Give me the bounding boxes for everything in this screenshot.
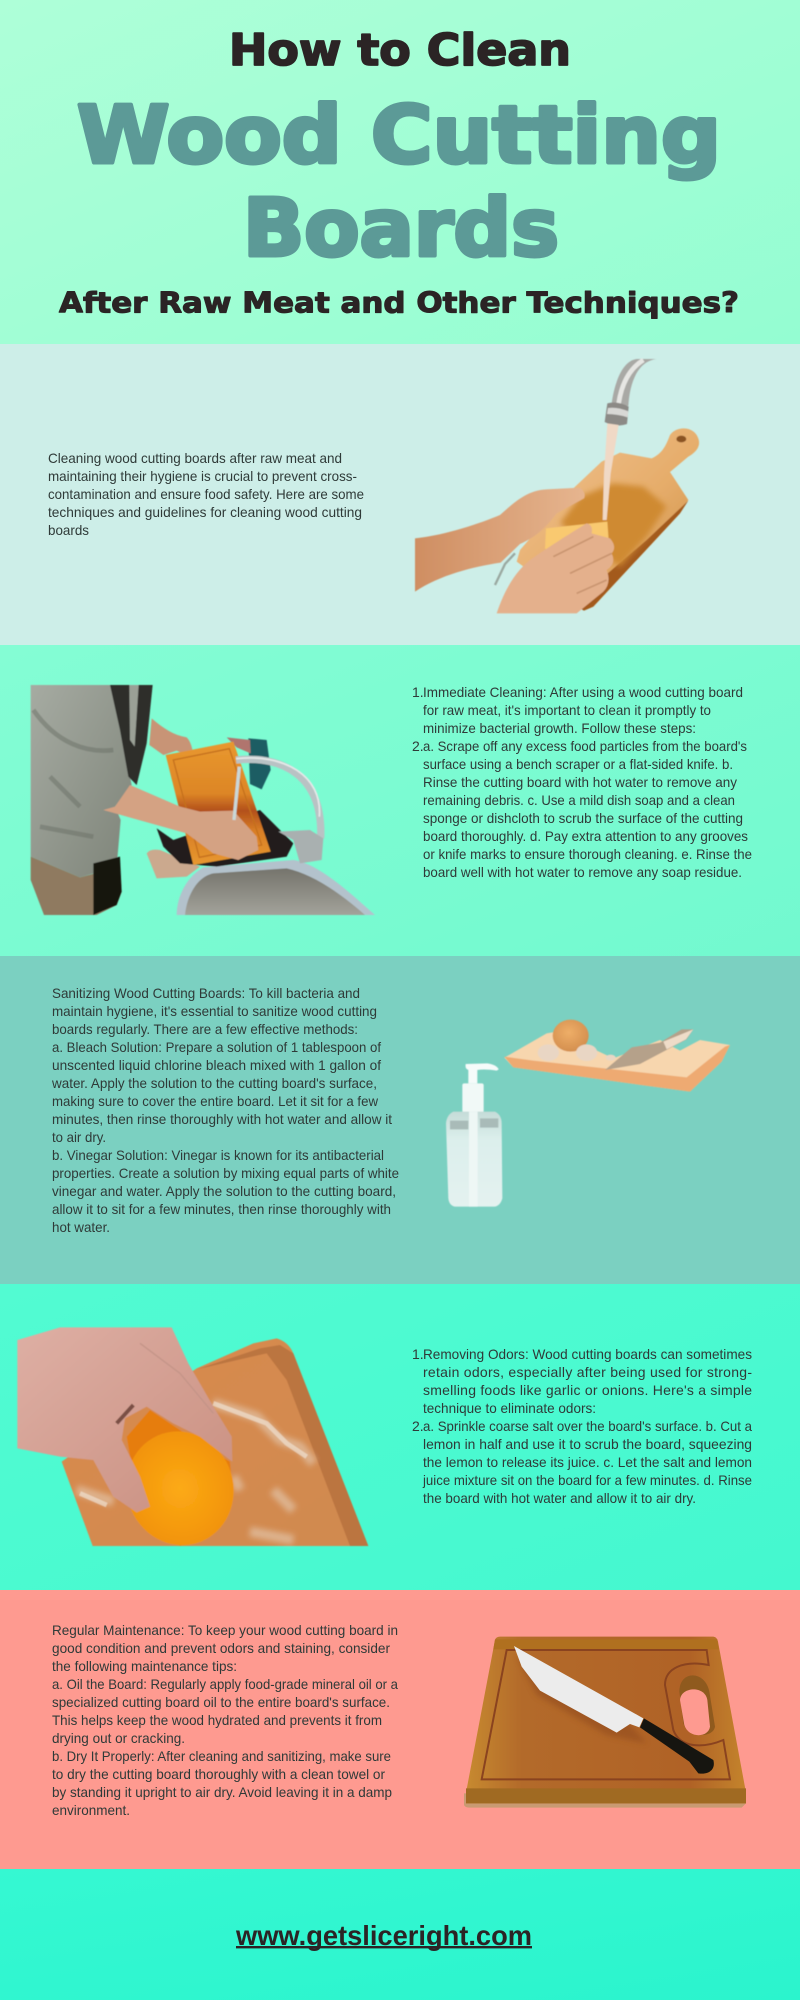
text: sanitizing: vinegar and water. Apply the solution to the cutting board, <box>52 1183 396 1199</box>
image: board with onion and knife, soap bottle <box>446 1020 730 1207</box>
text: regular maintenance: Regular Maintenance: To keep your wood cutting board in <box>52 1622 398 1638</box>
text: removing odors list: juice mixture sit on the board for a few minutes. d. Rinse <box>422 1472 752 1488</box>
text: regular maintenance: specialized cutting board oil to the entire board's surface. <box>52 1694 390 1710</box>
text: regular maintenance: a. Oil the Board: Regularly apply food-grade mineral oil or a <box>52 1676 398 1692</box>
text: immediate cleaning list: board well with hot water to remove any soap residue. <box>423 864 742 880</box>
text: immediate cleaning list: Rinse the cutting board with hot water to remove any <box>423 774 737 790</box>
text: removing odors list: the board with hot water and allow it to air dry. <box>423 1490 696 1506</box>
image: hand scrubbing board with lemon and salt <box>17 1327 368 1559</box>
text: removing odors list: lemon in half and use it to scrub the board, squeezing <box>423 1436 752 1452</box>
text: sanitizing: b. Vinegar Solution: Vinegar is known for its antibacterial <box>52 1147 384 1163</box>
text: immediate cleaning list: or knife marks to ensure thorough cleaning. e. Rinse the <box>423 846 752 862</box>
text: immediate cleaning list: Immediate Cleaning: After using a wood cutting board <box>423 684 743 700</box>
text: sanitizing: minutes, then rinse thoroughly with hot water and allow it <box>52 1111 392 1127</box>
text: removing odors list: 2. <box>412 1418 424 1434</box>
panel: footer <box>0 1869 800 2000</box>
text: immediate cleaning list: 2. <box>412 738 424 754</box>
text: removing odors list: retain odors, especially after being used for strong- <box>423 1364 752 1380</box>
image: wooden board with chef knife <box>464 1637 746 1808</box>
image: man rinsing board at sink <box>31 685 375 915</box>
heading: How to Clean: How to Clean <box>229 25 571 76</box>
text: removing odors list: smelling foods like garlic or onions. Here's a simple <box>423 1382 752 1398</box>
text: regular maintenance: drying out or cracking. <box>52 1730 185 1746</box>
text: regular maintenance: This helps keep the wood hydrated and prevents it from <box>52 1712 382 1728</box>
text: removing odors list: Removing Odors: Wood cutting boards can sometimes <box>423 1346 752 1362</box>
text: sanitizing: unscented liquid chlorine bleach mixed with 1 gallon of <box>52 1057 381 1073</box>
text: sanitizing: hot water. <box>52 1219 110 1235</box>
text: immediate cleaning list <box>412 684 752 880</box>
text: immediate cleaning list: board thoroughly. d. Pay extra attention to any grooves <box>423 828 748 844</box>
panel: sanitizing <box>0 956 800 1284</box>
text: sanitizing: boards regularly. There are a few effective methods: <box>52 1021 358 1037</box>
text: immediate cleaning list: sponge or dishcloth to scrub the surface of the cutting <box>423 810 743 826</box>
heading: Wood Cutting: Wood Cutting <box>77 90 721 182</box>
text: sanitizing: allow it to sit for a few minutes, then rinse thoroughly with <box>52 1201 391 1217</box>
text: introduction <box>48 450 364 538</box>
text: sanitizing: to air dry. <box>52 1129 106 1145</box>
text: introduction: boards <box>48 522 89 538</box>
text: removing odors list: the lemon to release its juice. c. Let the salt and lemon <box>423 1454 752 1470</box>
text: removing odors list <box>412 1346 752 1506</box>
panel: introduction <box>0 344 800 645</box>
text: removing odors list: 1. <box>412 1346 424 1362</box>
image: hands washing board under faucet <box>415 359 699 613</box>
panel: immediate cleaning <box>0 645 800 956</box>
text: introduction: Cleaning wood cutting boards after raw meat and <box>48 450 342 466</box>
text: sanitizing: maintain hygiene, it's essential to sanitize wood cutting <box>52 1003 377 1019</box>
text: sanitizing: a. Bleach Solution: Prepare a solution of 1 tablespoon of <box>52 1039 381 1055</box>
text: immediate cleaning list: minimize bacterial growth. Follow these steps: <box>423 720 696 736</box>
text: regular maintenance: to dry the cutting board thoroughly with a clean towel or <box>52 1766 385 1782</box>
text: regular maintenance: environment. <box>52 1802 130 1818</box>
text: regular maintenance: good condition and prevent odors and staining, consider <box>52 1640 390 1656</box>
text: sanitizing: properties. Create a solution by mixing equal parts of white <box>52 1165 399 1181</box>
text: sanitizing: Sanitizing Wood Cutting Boards: To kill bacteria and <box>52 985 360 1001</box>
heading: subtitle: After Raw Meat and Other Techniques? <box>59 286 739 320</box>
text: immediate cleaning list: for raw meat, it's important to clean it promptly to <box>423 702 711 718</box>
text: sanitizing: water. Apply the solution to the cutting board's surface, <box>51 1075 377 1091</box>
text: regular maintenance: the following maintenance tips: <box>52 1658 237 1674</box>
panel: header <box>0 0 800 344</box>
text: sanitizing: making sure to cover the entire board. Let it sit for a few <box>52 1093 379 1109</box>
text: removing odors list: technique to eliminate odors: <box>423 1400 596 1416</box>
text: introduction: contamination and ensure food safety. Here are some <box>48 486 364 502</box>
text: sanitizing <box>51 985 399 1235</box>
text: regular maintenance <box>52 1622 398 1818</box>
heading: Boards: Boards <box>243 182 559 274</box>
text: removing odors list: a. Sprinkle coarse salt over the board's surface. b. Cut a <box>423 1418 752 1434</box>
panel: regular maintenance <box>0 1590 800 1869</box>
text: website link: www.getsliceright.com <box>235 1920 532 1951</box>
text: regular maintenance: b. Dry It Properly: After cleaning and sanitizing, make sure <box>52 1748 391 1764</box>
text: immediate cleaning list: 1. <box>412 684 424 700</box>
text: immediate cleaning list: a. Scrape off any excess food particles from the board's <box>423 738 747 754</box>
text: introduction: maintaining their hygiene is crucial to prevent cross- <box>48 468 357 484</box>
panel: removing odors <box>0 1284 800 1590</box>
text: immediate cleaning list: surface using a bench scraper or a flat-sided knife. b. <box>423 756 733 772</box>
text: introduction: techniques and guidelines for cleaning wood cutting <box>48 504 362 520</box>
text: immediate cleaning list: remaining debris. c. Use a mild dish soap and a clean <box>423 792 735 808</box>
text: regular maintenance: by standing it upright to air dry. Avoid leaving it in a damp <box>52 1784 392 1800</box>
